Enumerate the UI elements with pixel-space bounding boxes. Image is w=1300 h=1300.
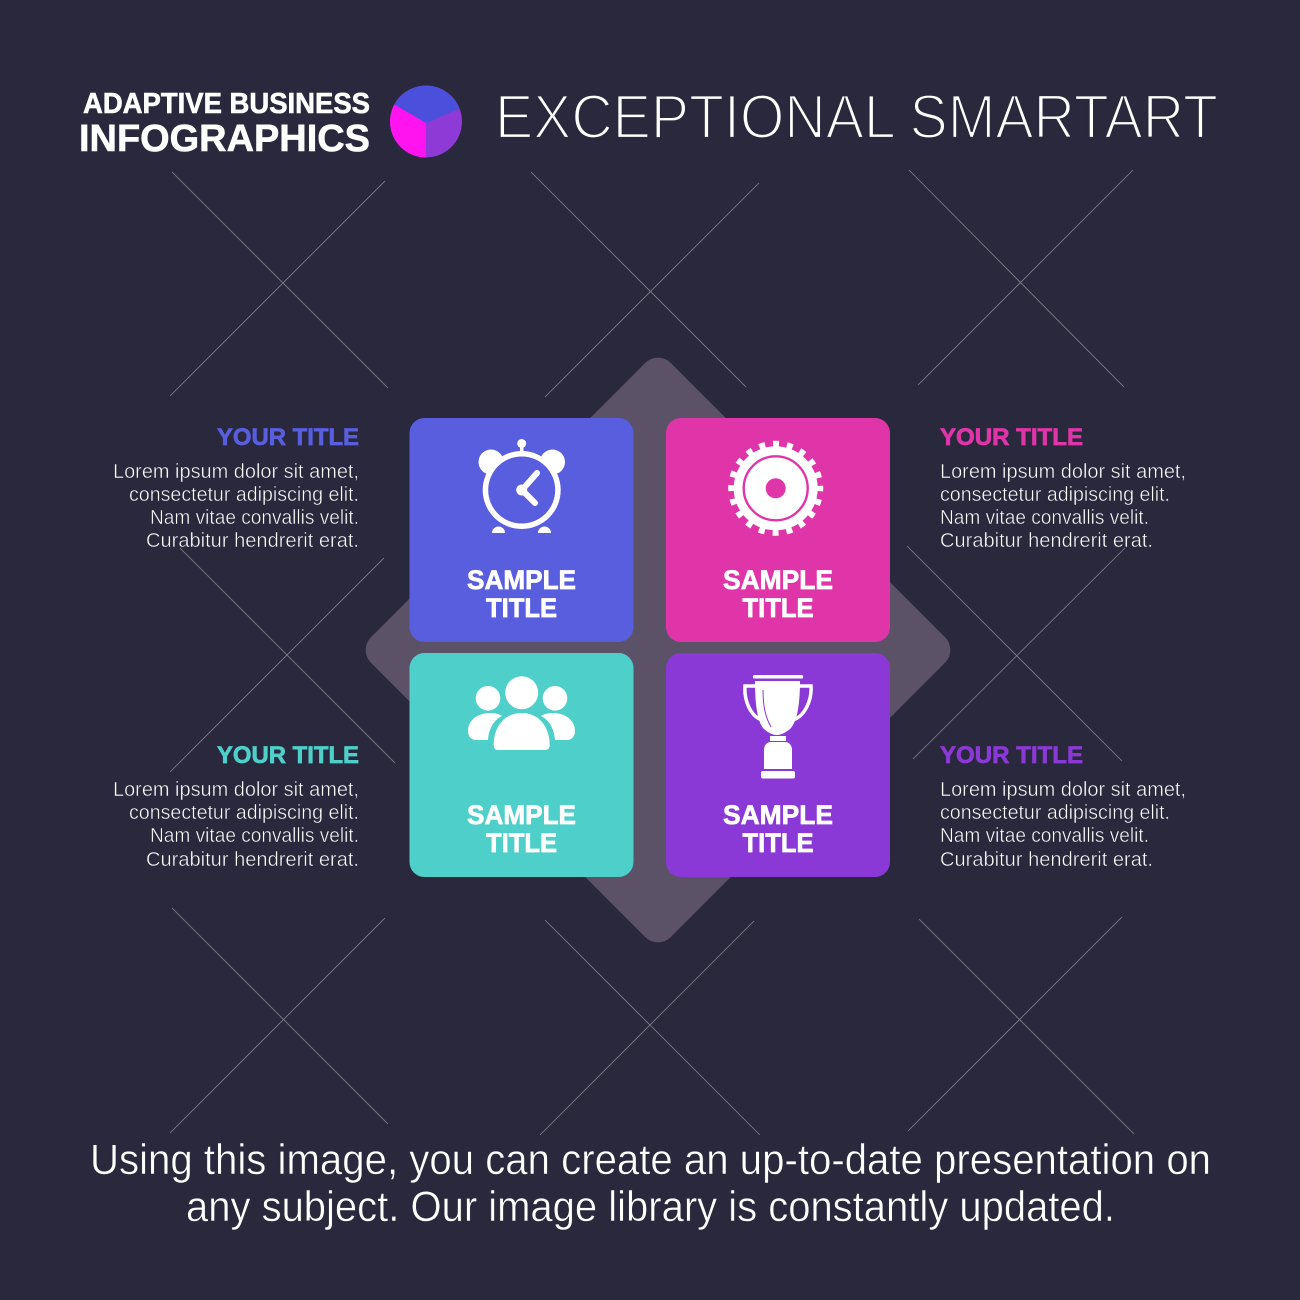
card: pink gear	[666, 418, 890, 642]
text block: top left: YOUR TITLE	[217, 424, 359, 451]
icon: alarm clock	[478, 439, 565, 533]
header brand text: ADAPTIVE BUSINESS	[83, 88, 370, 120]
header brand text: INFOGRAPHICS	[79, 118, 370, 160]
card label: TITLE	[486, 593, 557, 623]
text block: top right: YOUR TITLE	[940, 424, 1083, 451]
text block: bottom right: consectetur adipiscing elit.	[940, 802, 1170, 824]
text block: top right: Curabitur hendrerit erat.	[940, 530, 1153, 552]
text block: top right: Nam vitae convallis velit.	[940, 507, 1149, 529]
text block: top left: consectetur adipiscing elit.	[129, 484, 359, 506]
text block: bottom left: Nam vitae convallis velit.	[150, 825, 359, 847]
card label: SAMPLE	[723, 800, 833, 830]
central diamond backdrop	[358, 350, 958, 950]
footer text: Using this image, you can create an up-to-date presentation on	[90, 1136, 1211, 1184]
text block: bottom left: Curabitur hendrerit erat.	[146, 849, 359, 871]
text block: top left: Nam vitae convallis velit.	[150, 507, 359, 529]
card label: SAMPLE	[467, 565, 576, 595]
card label	[467, 565, 576, 623]
text block: bottom left: Lorem ipsum dolor sit amet,	[113, 779, 359, 801]
text block: bottom right: YOUR TITLE	[940, 742, 1083, 769]
header pie chart icon	[390, 86, 462, 158]
text block: top right: consectetur adipiscing elit.	[940, 484, 1170, 506]
text block: bottom left	[113, 742, 359, 871]
card: purple trophy	[666, 653, 890, 877]
icon: gear	[731, 444, 820, 533]
icon: trophy	[745, 675, 811, 778]
card label: TITLE	[742, 828, 814, 858]
text block: bottom right	[940, 742, 1186, 871]
icon: group of people	[468, 676, 575, 750]
card: teal people	[410, 653, 634, 877]
text block: bottom left: consectetur adipiscing elit.	[129, 802, 359, 824]
card label	[467, 800, 576, 858]
card label	[723, 565, 833, 623]
footer text: any subject. Our image library is constantly updated.	[186, 1183, 1115, 1231]
header brand text	[79, 88, 370, 160]
main title: EXCEPTIONAL SMARTART	[495, 83, 1218, 152]
text block: bottom right: Nam vitae convallis velit.	[940, 825, 1149, 847]
text block: top right: Lorem ipsum dolor sit amet,	[940, 461, 1186, 483]
card label: TITLE	[486, 828, 557, 858]
footer text	[90, 1136, 1211, 1231]
text block: top left: Curabitur hendrerit erat.	[146, 530, 359, 552]
card label: SAMPLE	[723, 565, 833, 595]
text block: top right	[940, 424, 1186, 552]
card label	[723, 800, 833, 858]
text block: bottom left: YOUR TITLE	[217, 742, 359, 769]
text block: top left: Lorem ipsum dolor sit amet,	[113, 461, 359, 483]
card: blue clock	[410, 418, 634, 642]
card label: TITLE	[742, 593, 814, 623]
card label: SAMPLE	[467, 800, 576, 830]
text block: top left	[113, 424, 359, 552]
text block: bottom right: Lorem ipsum dolor sit amet,	[940, 779, 1186, 801]
text block: bottom right: Curabitur hendrerit erat.	[940, 849, 1153, 871]
